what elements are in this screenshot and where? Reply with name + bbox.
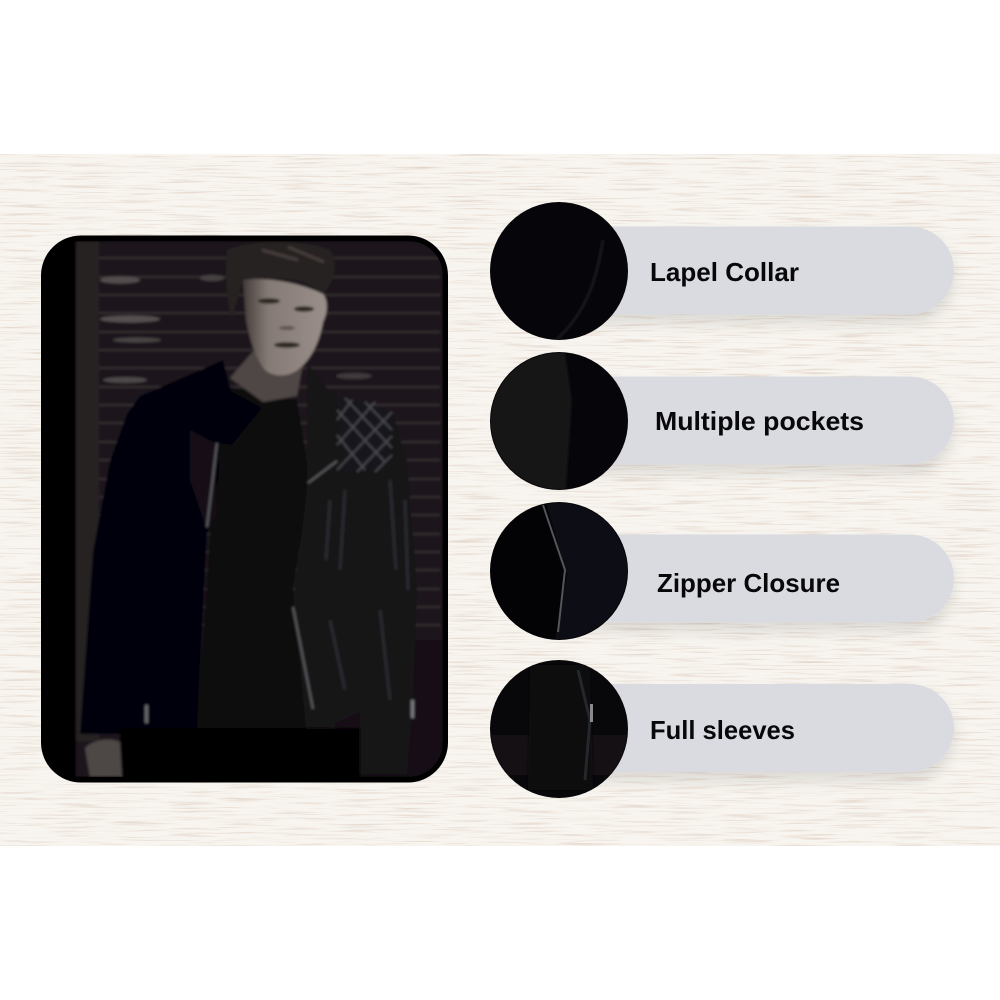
leather highlights (326, 480, 408, 700)
face (243, 279, 327, 375)
hair (227, 243, 334, 310)
label: Zipper Closure (657, 568, 840, 598)
trousers (120, 728, 360, 778)
pill (560, 376, 954, 464)
feature row: Full sleeves (490, 660, 954, 798)
thumbnail: zipper (490, 500, 630, 640)
label: Lapel Collar (650, 257, 799, 287)
zippers (207, 443, 337, 709)
thumbnail: collar (490, 202, 628, 340)
lapel (190, 430, 217, 530)
neck (228, 350, 304, 404)
pill (560, 684, 954, 772)
collar shadow on tee (219, 389, 261, 444)
quilted shoulder (337, 396, 392, 472)
feature row: Multiple pockets (490, 352, 954, 490)
thumbnail: sleeve (490, 660, 630, 798)
wall shutters (46, 241, 443, 777)
pill (560, 226, 954, 314)
photo panel: man in black leather jacket (41, 236, 448, 782)
left jacket panel (80, 360, 232, 734)
hair highlights (262, 247, 324, 262)
background: whitewashed wood band (0, 154, 1000, 846)
tee shirt (197, 385, 310, 735)
feature row: Lapel Collar (490, 202, 954, 340)
facial shading (258, 298, 314, 348)
thumbnail: pocket (490, 352, 628, 490)
right jacket panel (293, 363, 417, 774)
pill (560, 534, 954, 622)
hand (85, 740, 122, 777)
dark door post (46, 241, 99, 777)
label: Full sleeves (650, 715, 795, 745)
feature row: Zipper Closure (490, 500, 954, 640)
pocket zip pull (145, 705, 148, 723)
label: Multiple pockets (655, 406, 864, 436)
